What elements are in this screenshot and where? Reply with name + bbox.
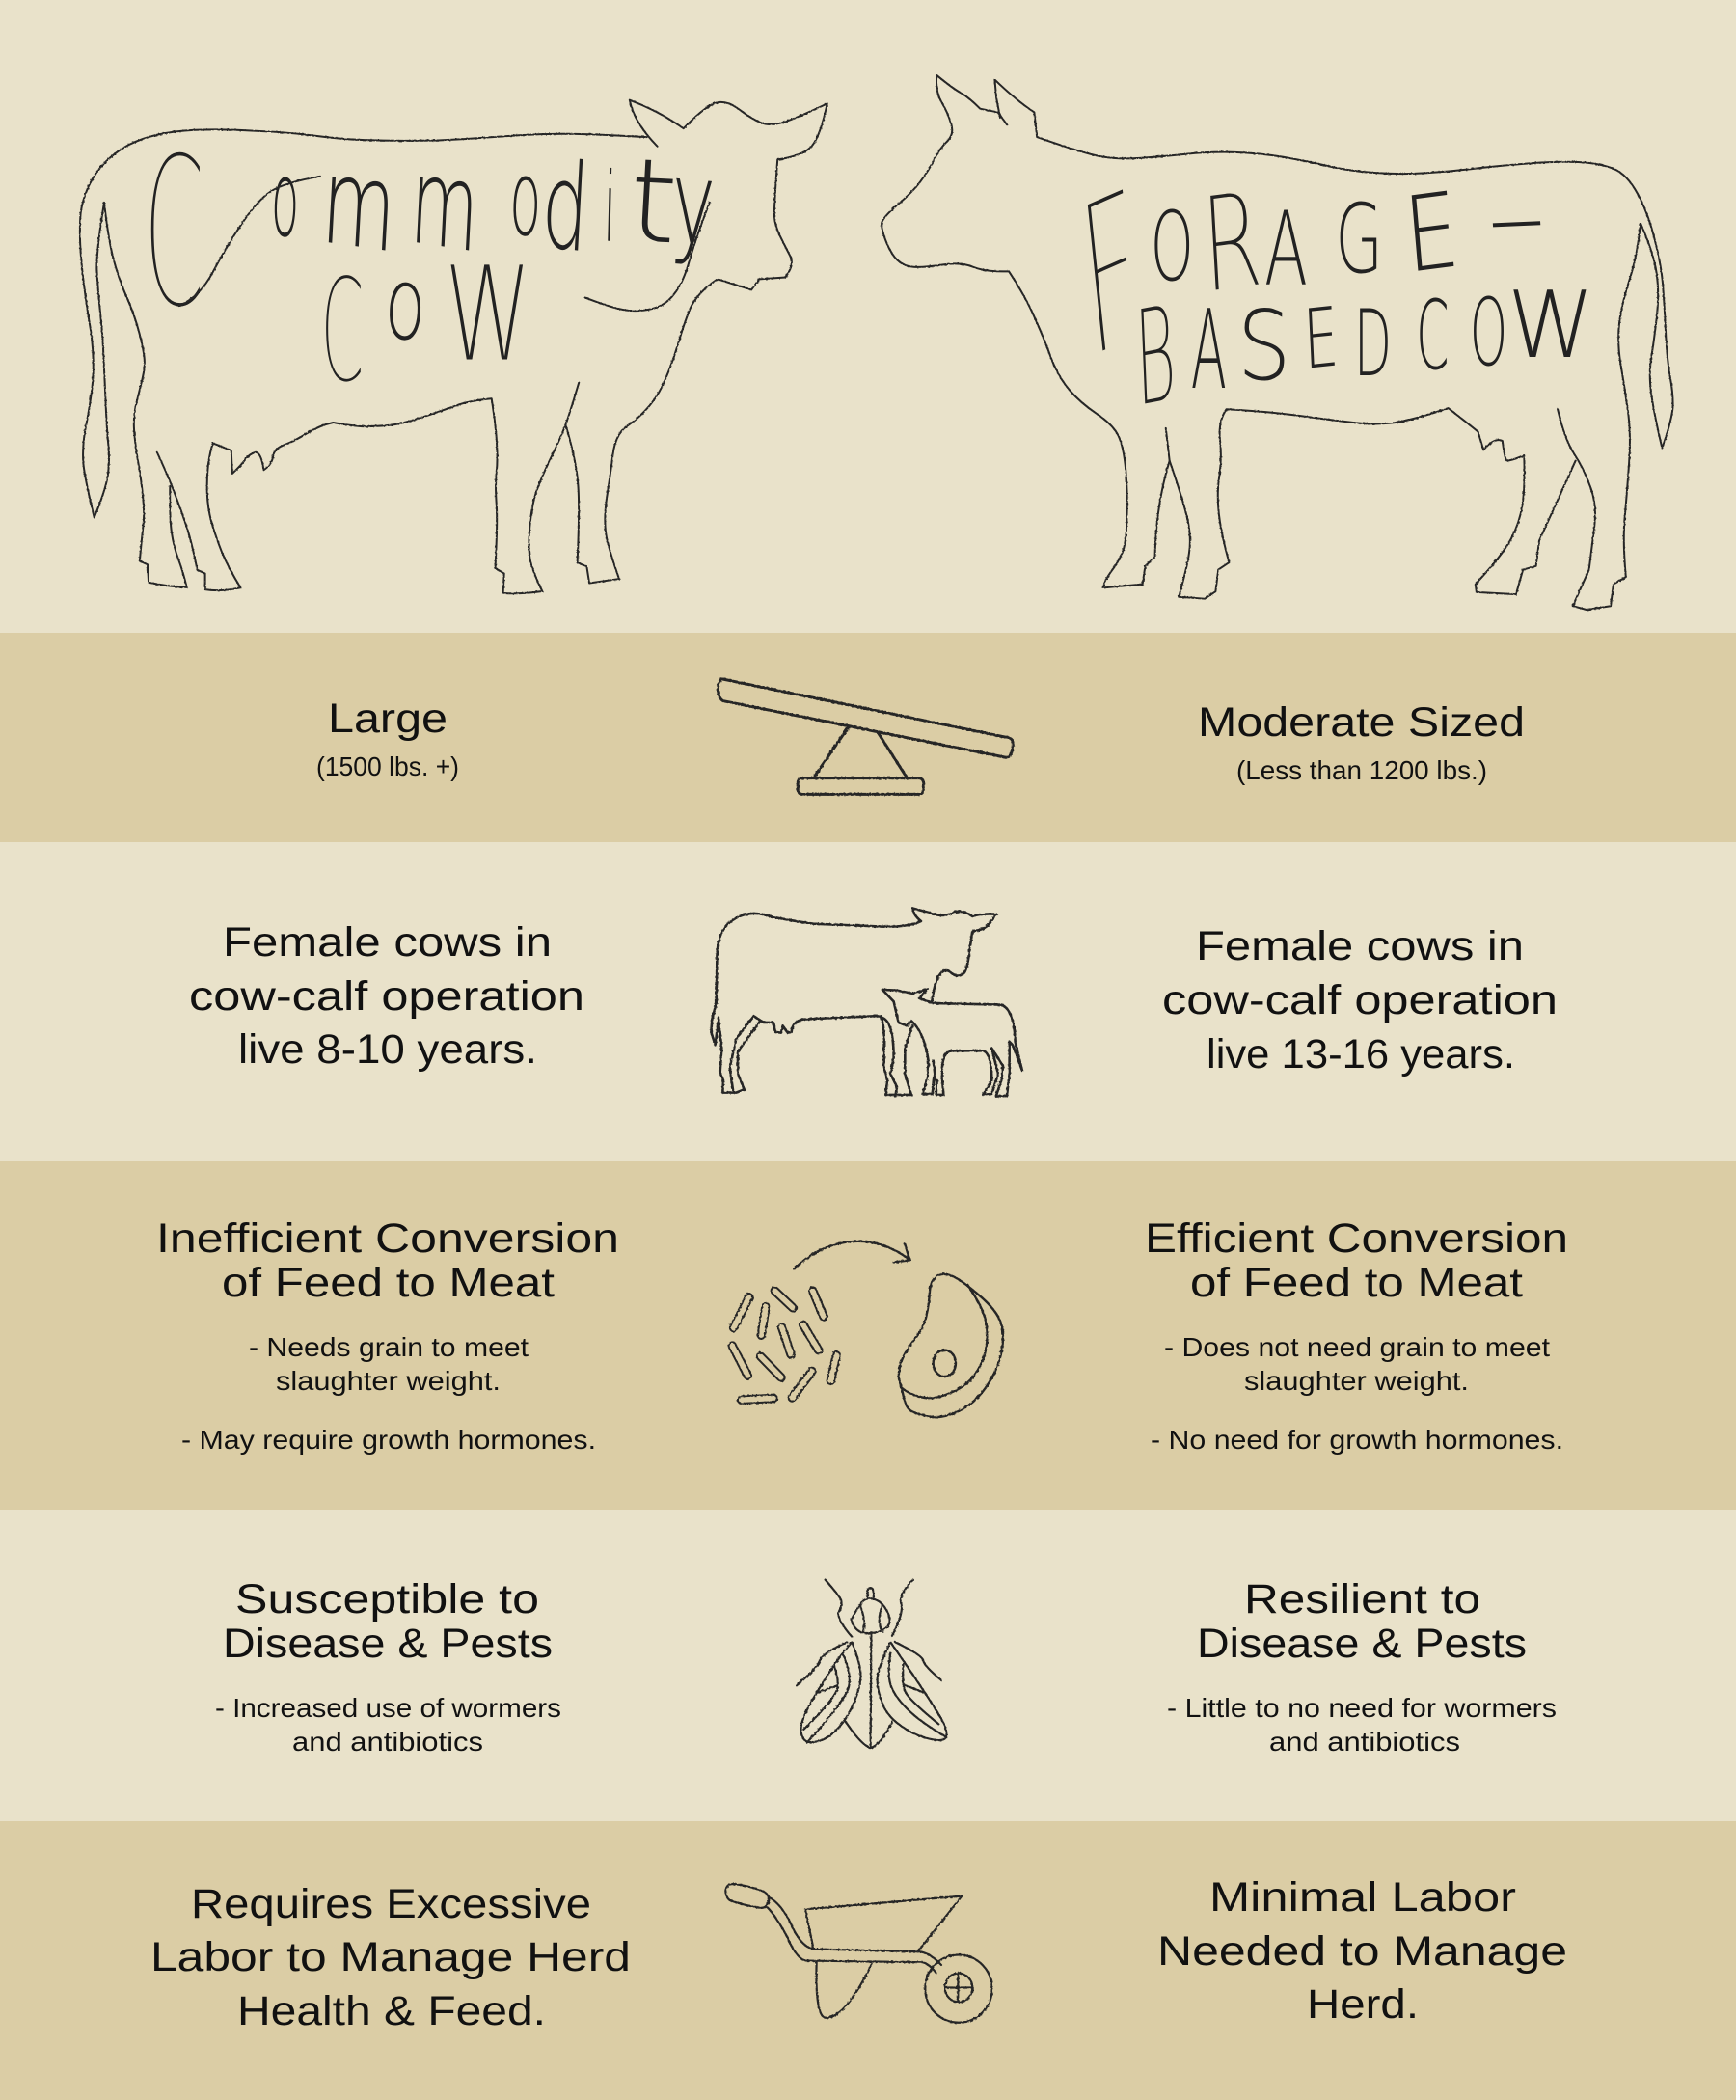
text: forage-based disease — [1167, 1576, 1557, 1757]
panel: row 5 labor — [0, 1821, 1736, 2100]
text: forage-based size: Moderate Sized — [1198, 699, 1525, 746]
text: commodity size: (1500 lbs. +) — [316, 751, 459, 781]
illustration: forage-based cow outline — [882, 75, 1673, 610]
text: commodity lifespan: Female cows in — [223, 919, 552, 966]
heading: Commodity Cow hand lettering — [143, 111, 717, 415]
text: forage-based feed conversion: Efficient Conversion — [1145, 1215, 1568, 1262]
text: commodity feed conversion: - Needs grain to meet — [249, 1332, 529, 1362]
heading: Commodity Cow hand lettering: o — [507, 137, 544, 262]
text: forage-based disease: - Little to no need for wormers — [1167, 1693, 1557, 1723]
text: commodity size — [316, 695, 459, 781]
text: commodity labor: Health & Feed. — [237, 1988, 546, 2034]
text: commodity lifespan — [189, 919, 584, 1073]
text: commodity labor: Labor to Manage Herd — [150, 1934, 631, 1980]
heading: Forage-Based Cow hand lettering: F — [1065, 147, 1153, 408]
panel: row 3 feed conversion — [0, 1161, 1736, 1510]
heading: Forage-Based Cow hand lettering: A — [1264, 190, 1308, 309]
icon: fly — [797, 1580, 947, 1748]
text: commodity feed conversion: of Feed to Meat — [222, 1260, 555, 1306]
text: forage-based feed conversion: - Does not need grain to meet — [1164, 1332, 1550, 1362]
text: forage-based labor: Herd. — [1307, 1981, 1419, 2028]
heading: Forage-Based Cow hand lettering: O — [1470, 279, 1507, 387]
text: commodity feed conversion: Inefficient Conversion — [156, 1215, 619, 1262]
text: forage-based labor: Needed to Manage — [1157, 1928, 1567, 1975]
text: commodity disease: - Increased use of wormers — [215, 1693, 561, 1723]
heading: Forage-Based Cow hand lettering: S — [1237, 290, 1291, 402]
heading: Commodity Cow hand lettering: t — [626, 134, 678, 273]
text: commodity labor — [150, 1881, 631, 2034]
heading: Commodity Cow hand lettering: o — [269, 138, 302, 263]
text: commodity lifespan: live 8-10 years. — [238, 1026, 537, 1073]
text: commodity labor: Requires Excessive — [191, 1881, 591, 1927]
heading: Forage-Based Cow hand lettering: – — [1486, 158, 1549, 275]
text: forage-based lifespan: cow-calf operation — [1162, 977, 1558, 1023]
meat cut — [899, 1274, 1003, 1417]
text: commodity size: Large — [328, 695, 448, 742]
panel: row 2 lifespan — [0, 842, 1736, 1161]
heading: Forage-Based Cow hand lettering: O — [1151, 192, 1194, 303]
text: forage-based feed conversion: - No need for growth hormones. — [1151, 1425, 1563, 1455]
heading: Forage-Based Cow hand lettering: E — [1402, 167, 1463, 298]
heading: Forage-Based Cow hand lettering: E — [1302, 288, 1341, 389]
heading: Forage-Based Cow hand lettering: C — [1416, 281, 1449, 392]
heading: Commodity Cow hand lettering: i — [602, 151, 617, 264]
text: commodity disease: and antibiotics — [292, 1727, 483, 1757]
text: commodity disease — [215, 1576, 561, 1757]
heading: Forage-Based Cow hand lettering: W — [1507, 273, 1594, 379]
text: forage-based disease: Resilient to — [1244, 1576, 1480, 1623]
text: forage-based disease: and antibiotics — [1269, 1727, 1460, 1757]
text: commodity feed conversion: slaughter weight. — [276, 1366, 501, 1396]
text: forage-based lifespan: live 13-16 years. — [1207, 1031, 1515, 1077]
panel: row 4 disease and pests — [0, 1510, 1736, 1821]
panel: row 1 size — [0, 633, 1736, 842]
text: forage-based lifespan — [1162, 923, 1558, 1077]
grains — [732, 1291, 836, 1400]
text: forage-based feed conversion — [1145, 1215, 1568, 1455]
heading: Forage-Based Cow hand lettering: G — [1335, 184, 1383, 295]
arrow — [794, 1241, 909, 1269]
text: commodity disease: Disease & Pests — [223, 1621, 553, 1667]
panel: header with two cow drawings — [0, 0, 1736, 633]
text: forage-based size — [1198, 699, 1525, 785]
illustration: commodity cow outline — [80, 100, 827, 593]
text: forage-based disease: Disease & Pests — [1197, 1621, 1527, 1667]
text: forage-based lifespan: Female cows in — [1196, 923, 1524, 969]
heading: Forage-Based Cow hand lettering: D — [1354, 291, 1392, 397]
heading: Commodity Cow hand lettering: d — [539, 134, 591, 283]
text: forage-based labor — [1157, 1874, 1567, 2028]
text: commodity disease: Susceptible to — [235, 1576, 539, 1623]
heading: Commodity Cow hand lettering: w — [443, 196, 534, 403]
icon: feed grains turning into meat — [732, 1241, 1003, 1417]
icon: wheelbarrow — [725, 1884, 992, 2023]
icon: tilted seesaw — [719, 679, 1013, 794]
text: forage-based size: (Less than 1200 lbs.) — [1236, 755, 1487, 785]
text: commodity feed conversion — [156, 1215, 619, 1455]
heading: Commodity Cow hand lettering: o — [382, 244, 428, 368]
text: forage-based labor: Minimal Labor — [1209, 1874, 1516, 1921]
heading: Forage-Based Cow hand lettering: B — [1130, 277, 1180, 438]
heading: Forage-Based Cow hand lettering: R — [1199, 161, 1265, 324]
heading: Commodity Cow hand lettering: m — [319, 130, 398, 283]
text: commodity lifespan: cow-calf operation — [189, 973, 584, 1020]
heading: Commodity Cow hand lettering: C — [143, 111, 205, 356]
text: forage-based feed conversion: slaughter weight. — [1244, 1366, 1469, 1396]
heading: Commodity Cow hand lettering: y — [669, 135, 717, 274]
heading: Commodity Cow hand lettering: m — [408, 130, 481, 282]
heading: Forage-Based Cow hand lettering: A — [1191, 287, 1227, 414]
text: commodity feed conversion: - May require growth hormones. — [181, 1425, 596, 1455]
heading: Commodity Cow hand lettering: C — [320, 247, 365, 415]
text: forage-based feed conversion: of Feed to Meat — [1190, 1260, 1523, 1306]
icon: cow and calf — [711, 909, 1022, 1097]
heading: Forage-Based Cow hand lettering — [1065, 147, 1594, 438]
